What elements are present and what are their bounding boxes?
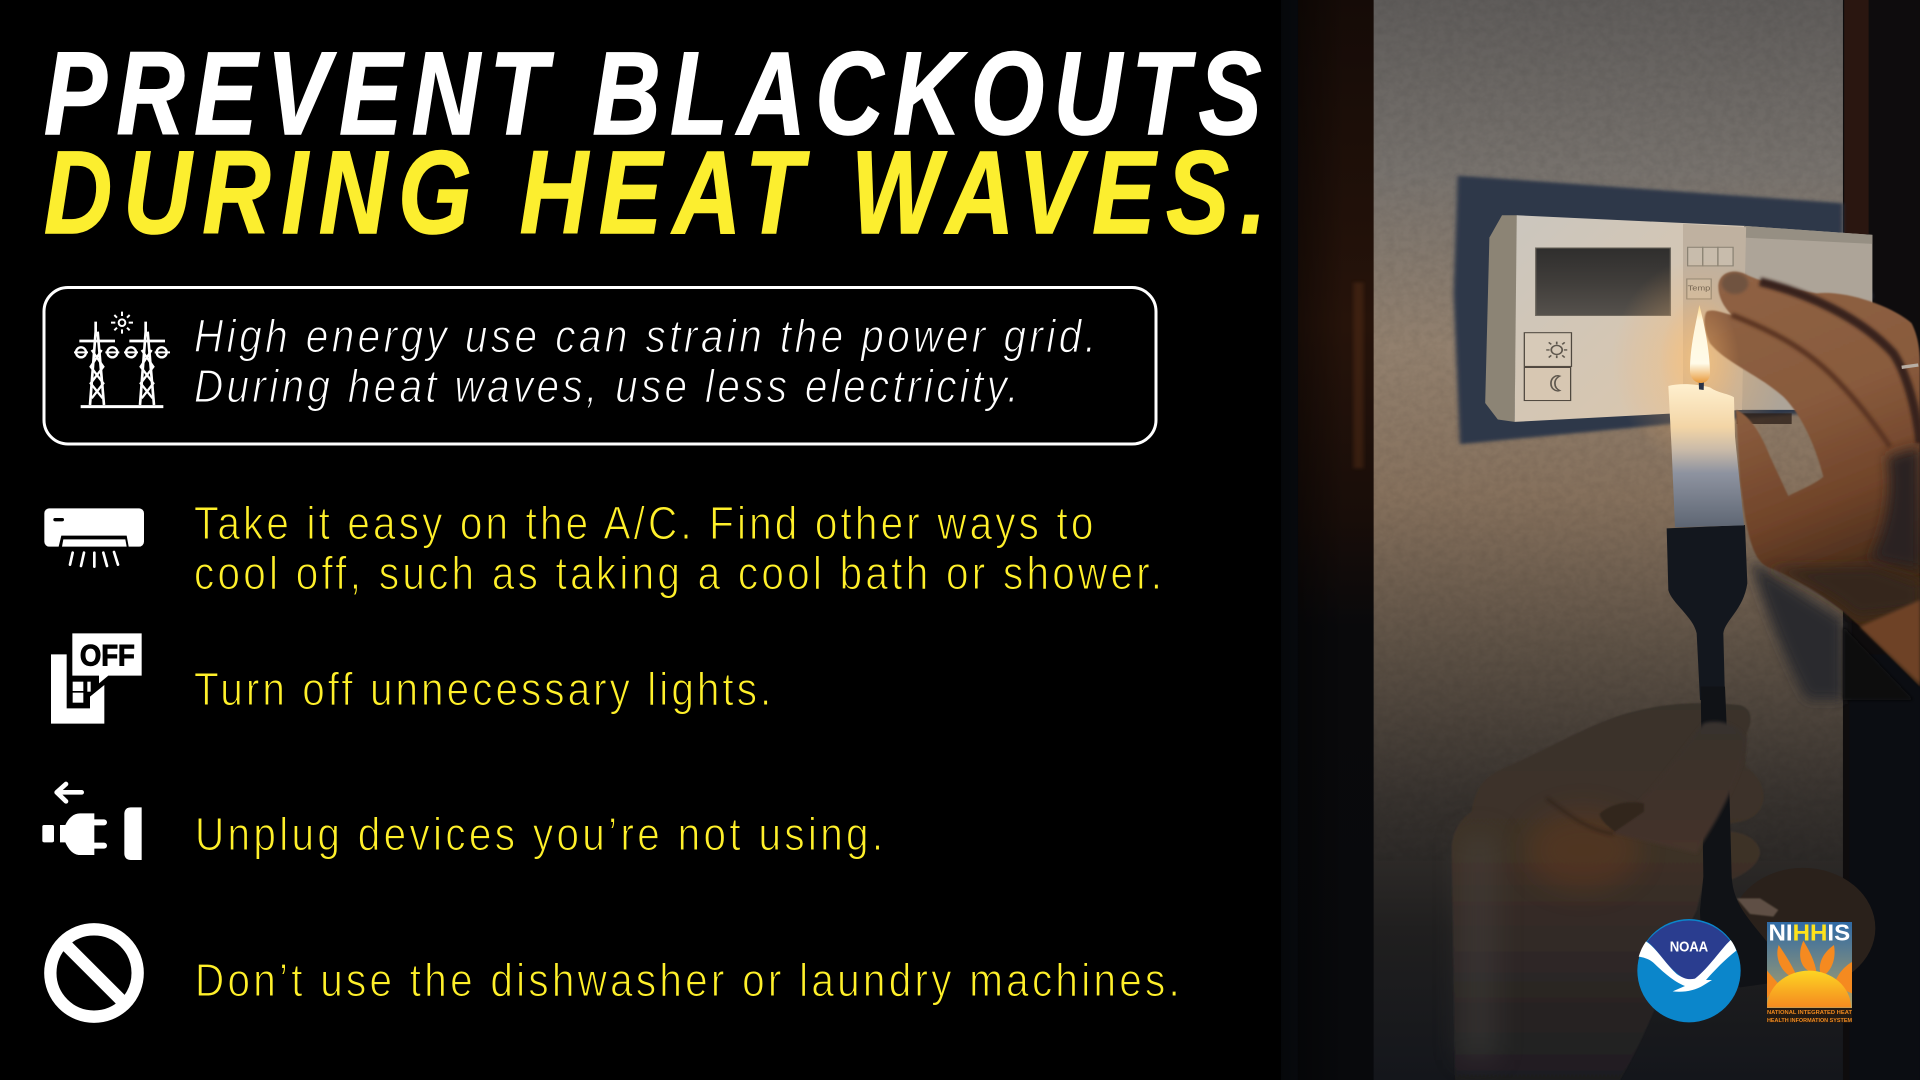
panel: power grid warning bbox=[44, 288, 1156, 444]
wick bbox=[1698, 371, 1704, 390]
thermostat bbox=[1485, 215, 1872, 422]
left door frame bbox=[1298, 0, 1374, 1080]
logo: NOAA bbox=[1637, 919, 1741, 1022]
wall bbox=[1372, 0, 1845, 1080]
tip: lights bbox=[51, 633, 771, 724]
flame bbox=[1690, 305, 1710, 383]
left edge fade bbox=[1235, 0, 1344, 1080]
frame highlight bbox=[1353, 282, 1364, 468]
title bbox=[44, 27, 1266, 258]
finger creases bbox=[1732, 315, 1890, 447]
forearm highlight bbox=[1860, 600, 1920, 683]
intro text line 2: During heat waves, use less electricity. bbox=[194, 362, 1019, 413]
logo: NIHHIS: NATIONAL INTEGRATED HEAT bbox=[1767, 1010, 1853, 1016]
icon: air conditioner bbox=[44, 508, 144, 567]
temp button bbox=[1687, 279, 1711, 299]
warm light on hand bbox=[1527, 810, 1640, 890]
candle stem bbox=[1700, 687, 1768, 987]
logo: NIHHIS bbox=[1767, 920, 1853, 1024]
tip: air conditioning bbox=[44, 499, 1162, 600]
fingernail bbox=[1722, 273, 1748, 294]
dish highlight bbox=[1737, 898, 1778, 917]
lower hand bbox=[1452, 703, 1764, 1080]
tip text: Unplug devices you’re not using. bbox=[195, 810, 883, 861]
ring bbox=[1902, 365, 1918, 367]
title line 1: PREVENT BLACKOUTS bbox=[44, 27, 1262, 159]
intro text line 1: High energy use can strain the power grid. bbox=[194, 312, 1096, 363]
shadow below wrist bbox=[1750, 560, 1843, 700]
right housing bbox=[1740, 226, 1872, 410]
sun symbol bbox=[1546, 342, 1567, 358]
title line 2: DURING HEAT WAVES. bbox=[44, 126, 1266, 258]
grey light on wrist bbox=[1460, 833, 1497, 1060]
upper hand and candle bbox=[1659, 272, 1920, 700]
tip text: Don’t use the dishwasher or laundry machines. bbox=[195, 956, 1180, 1007]
candle glow on thermostat bbox=[1611, 258, 1788, 465]
sun bbox=[1767, 971, 1851, 1007]
temp button: Temp bbox=[1688, 283, 1711, 292]
icon: light switch off: OFF bbox=[80, 639, 135, 672]
display bbox=[1536, 248, 1670, 315]
upper hand bbox=[1704, 272, 1920, 687]
sun rays bbox=[1767, 941, 1852, 998]
mode buttons bbox=[1688, 247, 1733, 266]
tip text line 2: cool off, such as taking a cool bath or shower. bbox=[194, 549, 1162, 600]
icon: transmission towers bbox=[74, 312, 170, 407]
tip: appliances bbox=[50, 929, 1180, 1017]
lower hand and candle stem bbox=[1452, 687, 1778, 1080]
sun button bbox=[1524, 333, 1571, 366]
candle holder dish bbox=[1731, 868, 1875, 988]
right door frame bbox=[1843, 0, 1920, 1080]
logos bbox=[1637, 919, 1853, 1024]
palm crease bbox=[1547, 798, 1613, 834]
thermostat shadow gap bbox=[1737, 413, 1792, 424]
logo: NOAA: NOAA bbox=[1670, 938, 1708, 955]
tip text: Turn off unnecessary lights. bbox=[194, 665, 771, 716]
side bbox=[1485, 215, 1518, 422]
wall texture bbox=[1372, 0, 1845, 861]
logo: NIHHIS: NIHHIS bbox=[1768, 920, 1850, 946]
dark palm shadow bbox=[1870, 447, 1920, 570]
candle glow bbox=[1659, 297, 1739, 423]
icon: prohibition sign bbox=[50, 929, 138, 1017]
panel outline bbox=[44, 288, 1156, 444]
photo backdrop bbox=[1235, 0, 1920, 1080]
candle holder cup bbox=[1667, 525, 1747, 700]
logo: NIHHIS: HEALTH INFORMATION SYSTEM bbox=[1767, 1018, 1852, 1024]
moon symbol bbox=[1551, 376, 1560, 391]
icon: unplugged plug bbox=[42, 784, 142, 860]
tip text line 1: Take it easy on the A/C. Find other ways to bbox=[194, 499, 1093, 550]
tip: unplug bbox=[42, 784, 883, 861]
moon button bbox=[1524, 367, 1571, 401]
thermostat shadow bbox=[1454, 176, 1872, 444]
photo: candle lighting a wall thermostat bbox=[1235, 0, 1920, 1080]
thumb bbox=[1613, 721, 1746, 853]
candle bbox=[1668, 384, 1744, 527]
hand silhouette bbox=[1704, 272, 1920, 687]
folded finger bbox=[1599, 802, 1644, 832]
body bbox=[1515, 215, 1744, 422]
icon: light switch off bbox=[51, 633, 142, 724]
